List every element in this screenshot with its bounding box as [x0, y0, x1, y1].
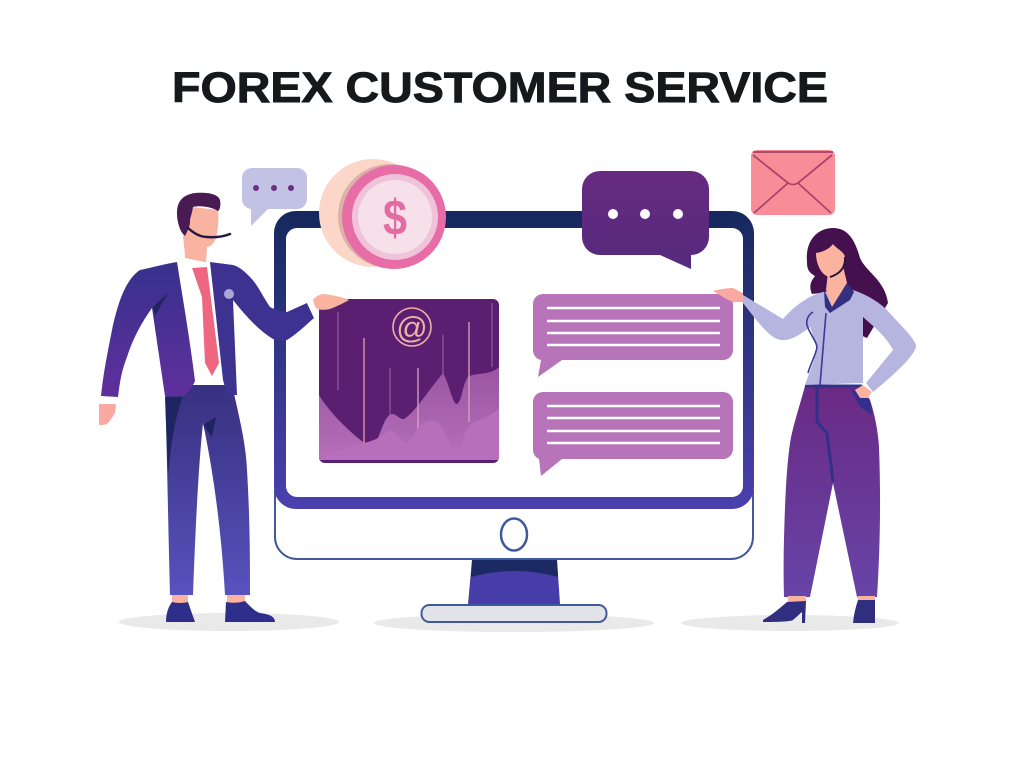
- speech bubble: dark: [582, 171, 709, 269]
- man cuff: [307, 301, 319, 318]
- icon: envelope: [751, 150, 835, 215]
- speech bubble: message two: [533, 392, 733, 476]
- icon: dollar coin: [319, 159, 446, 269]
- man left hand: [99, 404, 116, 425]
- woman shoes: [763, 600, 875, 623]
- woman headset: [830, 257, 845, 277]
- icon: dollar coin: $: [383, 190, 407, 246]
- man tie: [192, 267, 219, 376]
- speech bubble: message one: [533, 294, 733, 377]
- man trousers: [165, 385, 250, 595]
- man underarm shade: [153, 293, 168, 316]
- chart vertical lines: [338, 303, 492, 443]
- monitor stand: [468, 560, 560, 604]
- man jacket right side and arm: [210, 262, 314, 395]
- man ankles: [172, 595, 245, 604]
- at symbol: @: [396, 310, 428, 345]
- man headset: [188, 228, 230, 237]
- woman trouser details: [805, 386, 872, 482]
- man neck and face: [183, 207, 218, 263]
- man shirt: [177, 258, 223, 382]
- woman hair: [807, 228, 888, 338]
- monitor lower casing: [275, 490, 753, 559]
- woman hip hand: [855, 385, 872, 398]
- woman trousers: [784, 386, 880, 597]
- man pointing hand: [313, 294, 349, 310]
- man hair: [177, 193, 220, 236]
- chart back area: [319, 367, 499, 458]
- man pocket square: [224, 289, 234, 299]
- man jacket: [101, 262, 314, 397]
- monitor screen frame: [274, 211, 754, 509]
- woman ankles: [788, 596, 875, 603]
- woman collar: [824, 283, 854, 313]
- panel: chart: [319, 299, 499, 463]
- figure: man: [99, 193, 349, 622]
- woman blouse seams: [807, 312, 826, 385]
- woman pointing hand: [713, 288, 743, 302]
- title: FOREX CUSTOMER SERVICE: [172, 64, 828, 112]
- woman neck: [826, 266, 847, 307]
- camera ring: [501, 518, 527, 550]
- floor shadows: [119, 613, 899, 632]
- monitor: [274, 211, 754, 622]
- man jacket left side: [101, 262, 195, 397]
- chart front area: [319, 408, 499, 460]
- figure: woman: [713, 228, 916, 623]
- woman blouse: [743, 290, 916, 392]
- woman face: [816, 244, 845, 277]
- man shoes: [166, 601, 275, 622]
- monitor base: [422, 605, 606, 622]
- speech bubble: small: [242, 168, 307, 226]
